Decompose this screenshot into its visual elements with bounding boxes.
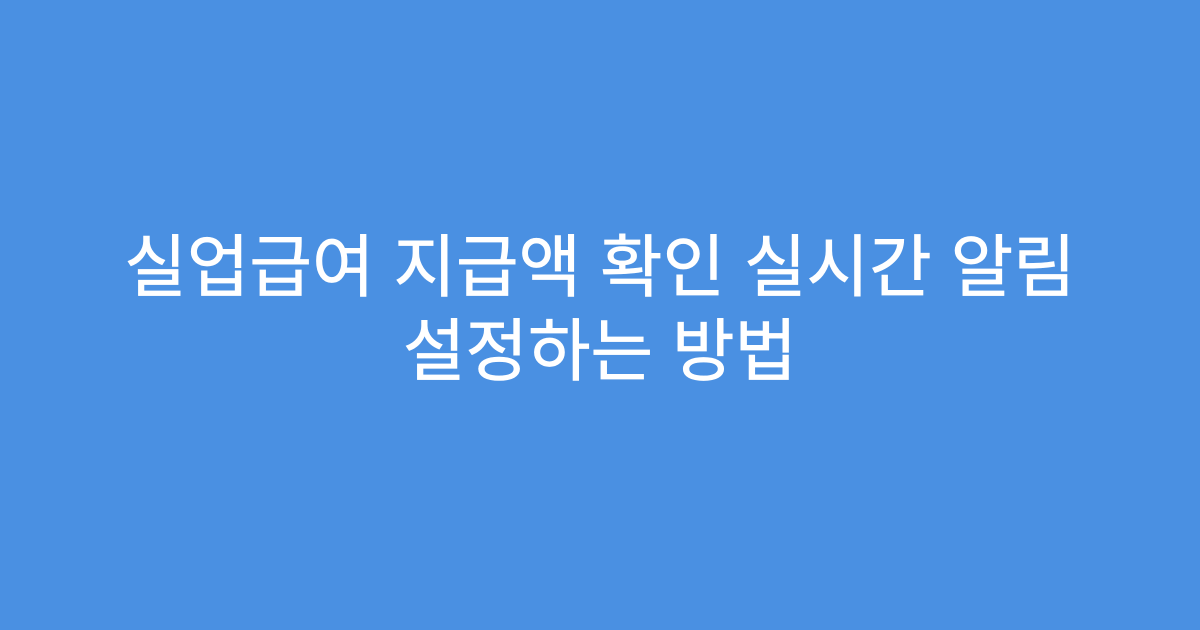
title: 설정하는 방법 <box>403 314 797 390</box>
title: 실업급여 지급액 확인 실시간 알림 <box>124 230 1076 306</box>
title <box>124 230 1076 390</box>
